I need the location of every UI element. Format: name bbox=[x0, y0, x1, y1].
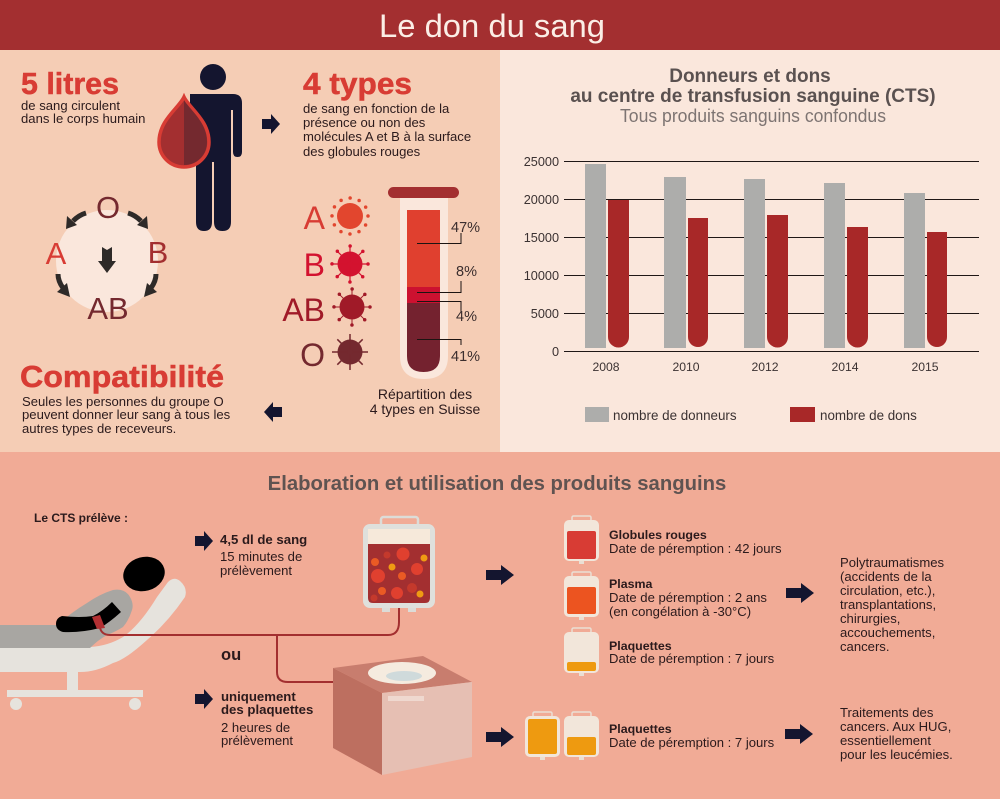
chart heading: Donneurs et dons bbox=[669, 66, 831, 87]
label: Le CTS prélève: Le CTS prélève : bbox=[34, 511, 128, 525]
compatibility diagram bbox=[46, 190, 168, 326]
blood type legend: A bbox=[304, 200, 326, 236]
heading: 4 types bbox=[303, 66, 471, 159]
test tube chart: 41% bbox=[451, 349, 480, 365]
bar chart: 5000 bbox=[531, 307, 559, 321]
chart legend: nombre de dons bbox=[820, 408, 917, 423]
arrow bbox=[195, 689, 213, 709]
text: indications: (accidents de la bbox=[840, 569, 932, 584]
product: Plaquettes bbox=[564, 628, 775, 676]
arrow bbox=[785, 724, 813, 744]
text: 4,5 dl de sang: prélèvement bbox=[220, 563, 292, 578]
bar chart: 25000 bbox=[524, 155, 559, 169]
heading: 4 types: présence ou non des bbox=[303, 115, 426, 130]
text: indications bbox=[840, 555, 945, 654]
heading: Compatibilité: Seules les personnes du groupe O bbox=[22, 394, 224, 409]
tube caption bbox=[370, 386, 480, 417]
product: Plaquettes: Date de péremption : 7 jours bbox=[609, 651, 775, 666]
heading: 5 litres: dans le corps humain bbox=[21, 111, 145, 126]
test tube chart: 4% bbox=[456, 309, 477, 325]
section heading: Elaboration et utilisation des produits sanguins bbox=[268, 473, 726, 495]
chart heading: au centre de transfusion sanguine (CTS) bbox=[570, 86, 936, 107]
text: uniquement des plaquettes: uniquement bbox=[221, 689, 296, 704]
text: 4,5 dl de sang bbox=[220, 532, 307, 578]
text: uniquement des plaquettes: 2 heures de bbox=[221, 720, 290, 735]
test tube chart bbox=[388, 187, 480, 379]
arrow bbox=[195, 531, 213, 551]
background panel: bottom bbox=[0, 452, 1000, 799]
text: uniquement des plaquettes: des plaquettes bbox=[221, 702, 313, 717]
product: Plasma: Date de péremption : 2 ans bbox=[609, 590, 767, 605]
compatibility diagram: A bbox=[46, 236, 67, 271]
chart heading bbox=[570, 66, 936, 126]
heading: 5 litres: de sang circulent bbox=[21, 98, 120, 113]
arrow bbox=[486, 727, 514, 747]
heading: 4 types: molécules A et B à la surface bbox=[303, 129, 471, 144]
bar chart: 10000 bbox=[524, 269, 559, 283]
heading: Compatibilité: autres types de receveurs. bbox=[22, 421, 176, 436]
tube caption: Répartition des bbox=[378, 386, 472, 402]
icon: human figure with blood drop bbox=[159, 64, 242, 231]
blood type legend: O bbox=[300, 337, 325, 373]
icon: blood bag bbox=[363, 517, 435, 612]
product: Plasma: (en congélation à -30°C) bbox=[609, 604, 751, 619]
icon: centrifuge bbox=[333, 656, 472, 775]
arrow bbox=[262, 114, 280, 134]
arrow bbox=[264, 402, 282, 422]
text: indications: circulation, etc.), bbox=[840, 583, 935, 598]
text: 4,5 dl de sang: 4,5 dl de sang bbox=[220, 532, 307, 547]
text: indications: accouchements, bbox=[840, 625, 935, 640]
text: uniquement des plaquettes bbox=[221, 689, 313, 748]
product: Plaquettes: Plaquettes bbox=[609, 639, 672, 653]
text: indications: transplantations, bbox=[840, 597, 936, 612]
heading: 4 types: 4 types bbox=[303, 66, 412, 101]
tube caption: 4 types en Suisse bbox=[370, 401, 480, 417]
chart heading: Tous produits sanguins confondus bbox=[620, 106, 886, 126]
title banner: Le don du sang bbox=[379, 8, 605, 44]
bar chart: 2008 bbox=[592, 360, 620, 374]
heading: Compatibilité bbox=[20, 359, 231, 436]
heading: 5 litres bbox=[21, 66, 145, 126]
text: indications plaquettes: pour les leucémies. bbox=[840, 747, 953, 762]
test tube chart: 47% bbox=[451, 220, 480, 236]
text: indications: cancers. bbox=[840, 639, 890, 654]
heading: 4 types: de sang en fonction de la bbox=[303, 101, 450, 116]
blood type legend: B bbox=[304, 247, 325, 283]
background panel: left top bbox=[0, 50, 500, 452]
text: indications plaquettes: cancers. Aux HUG, bbox=[840, 719, 951, 734]
bar chart: 2012 bbox=[751, 360, 779, 374]
compatibility diagram: O bbox=[96, 190, 120, 225]
title banner bbox=[0, 0, 1000, 50]
tubing bbox=[100, 604, 399, 682]
bar chart: 15000 bbox=[524, 231, 559, 245]
bar chart bbox=[524, 155, 979, 374]
test tube chart: 8% bbox=[456, 264, 477, 280]
heading: 4 types: des globules rouges bbox=[303, 144, 421, 159]
product: Plasma bbox=[564, 572, 767, 620]
arrow bbox=[486, 565, 514, 585]
text: indications: chirurgies, bbox=[840, 611, 900, 626]
text: indications plaquettes: Traitements des bbox=[840, 705, 934, 720]
heading: Compatibilité: Compatibilité bbox=[20, 359, 224, 394]
background panel: right top bbox=[500, 50, 1000, 452]
bar chart: 2015 bbox=[911, 360, 939, 374]
illustration: donor on bed bbox=[0, 552, 186, 710]
bar chart: 2010 bbox=[672, 360, 700, 374]
text: uniquement des plaquettes: prélèvement bbox=[221, 733, 293, 748]
text: indications: Polytraumatismes bbox=[840, 555, 945, 570]
product: Globules rouges bbox=[564, 516, 782, 564]
blood type legend bbox=[282, 198, 370, 373]
heading: Compatibilité: peuvent donner leur sang à tous les bbox=[22, 407, 231, 422]
product: Plaquettes (two bags): Plaquettes bbox=[609, 722, 672, 736]
product: Plaquettes (two bags): Date de péremption : 7 jours bbox=[609, 735, 775, 750]
text: indications plaquettes: essentiellement bbox=[840, 733, 931, 748]
chart legend bbox=[585, 407, 917, 423]
bar chart: 2014 bbox=[831, 360, 859, 374]
product: Globules rouges: Date de péremption : 42 jours bbox=[609, 541, 782, 556]
compatibility diagram: B bbox=[148, 235, 168, 270]
blood type legend: AB bbox=[282, 292, 325, 328]
compatibility diagram: AB bbox=[87, 291, 129, 326]
text: 4,5 dl de sang: 15 minutes de bbox=[220, 549, 302, 564]
product: Plasma: Plasma bbox=[609, 577, 653, 591]
product: Globules rouges: Globules rouges bbox=[609, 528, 707, 542]
label: ou: ou bbox=[221, 646, 241, 664]
arrow bbox=[786, 583, 814, 603]
product: Plaquettes (two bags) bbox=[525, 712, 775, 760]
text: indications plaquettes bbox=[840, 705, 953, 762]
chart legend: nombre de donneurs bbox=[613, 408, 737, 423]
bar chart: 0 bbox=[552, 345, 559, 359]
bar chart: 20000 bbox=[524, 193, 559, 207]
heading: 5 litres: 5 litres bbox=[21, 66, 119, 101]
